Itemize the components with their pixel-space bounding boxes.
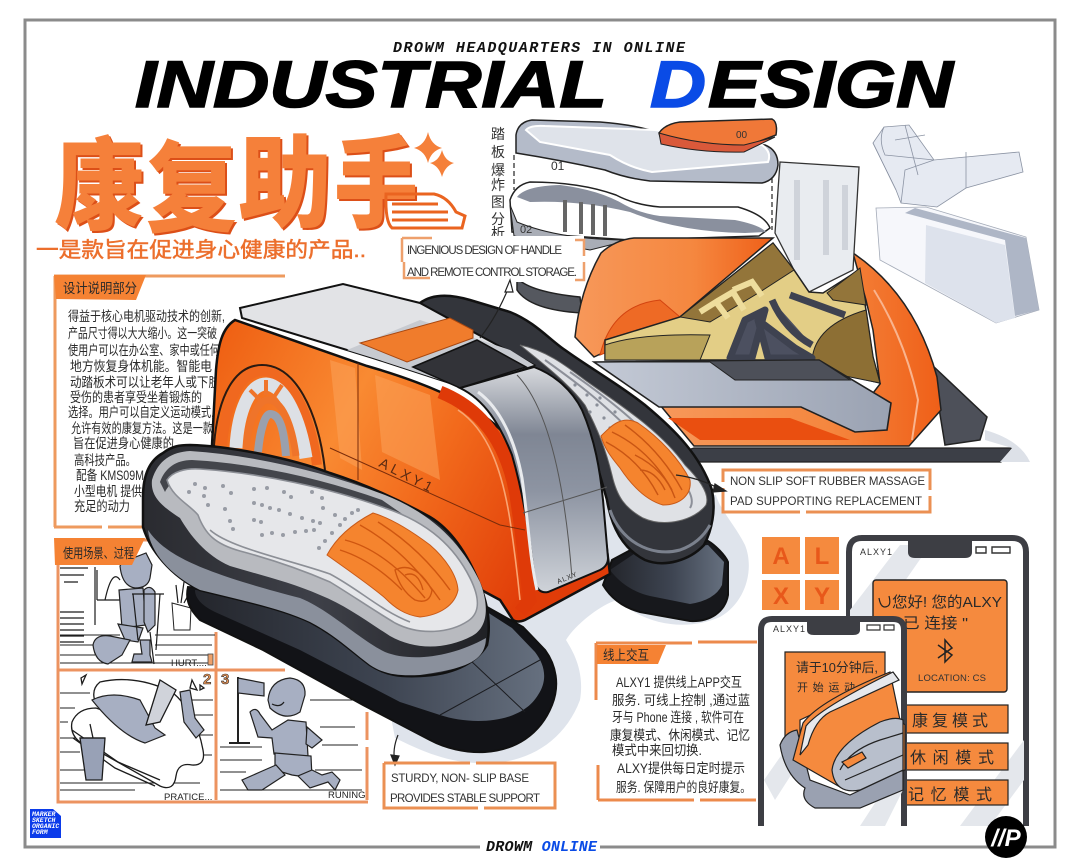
callout: non slip rubber pad bbox=[723, 470, 930, 512]
callout: handle design: AND REMOTE CONTROL STORAGE. bbox=[407, 267, 577, 279]
vertical label bbox=[491, 126, 505, 241]
vertical label: 分 bbox=[491, 211, 505, 227]
online body: 康复模式、休闲模式、记忆 bbox=[610, 727, 750, 743]
grey top cap bbox=[240, 284, 534, 388]
connected text: 已 连接 " bbox=[903, 615, 968, 632]
ALXY letter tiles: L bbox=[815, 543, 829, 570]
description body: 小型电机 提供 bbox=[74, 484, 142, 499]
phone body bbox=[761, 619, 904, 826]
part number 01: 01 bbox=[551, 159, 565, 173]
location text: LOCATION: CS bbox=[918, 673, 986, 684]
vertical label: 炸 bbox=[491, 177, 505, 193]
comic label: hurt: HURT.... bbox=[171, 658, 207, 669]
logo badge: //P bbox=[990, 825, 1022, 852]
description body: 得益于核心电机驱动技术的创新, bbox=[68, 308, 225, 324]
front pedal surface bbox=[167, 469, 477, 631]
description body: 充足的动力 bbox=[74, 499, 130, 514]
chinese title bbox=[54, 103, 418, 253]
online body bbox=[610, 674, 751, 795]
panel: design description bbox=[54, 275, 285, 527]
chinese title: 康 bbox=[54, 105, 144, 250]
rear pedal top surface bbox=[520, 345, 707, 522]
blue corner tag: SKETCH bbox=[32, 817, 56, 824]
rear orange shell bbox=[575, 238, 773, 357]
callout: sturdy base bbox=[384, 763, 555, 808]
description body: 地方恢复身体机能。智能电 bbox=[70, 358, 212, 374]
blue corner tag: MARKER bbox=[31, 811, 56, 818]
callout: handle design: INGENIOUS DESIGN OF HANDLE bbox=[407, 245, 562, 257]
orange outer arc bbox=[660, 253, 941, 446]
rear base bbox=[603, 541, 728, 621]
sock bbox=[775, 162, 859, 292]
online body: 服务. 保障用户的良好康复。 bbox=[616, 779, 751, 795]
rear pedal dots bbox=[573, 383, 617, 430]
chinese title: 复 bbox=[146, 108, 237, 253]
comic number 2: 2 bbox=[203, 671, 211, 688]
main title: INDUSTRIAL bbox=[135, 47, 607, 121]
layer 03 bbox=[517, 278, 582, 313]
online body: ALXY提供每日定时提示 bbox=[617, 761, 745, 776]
reminder text 2: 开始运动 bbox=[797, 680, 855, 694]
blue corner tag: FORM bbox=[32, 829, 49, 836]
blue corner tag: ORGANIC bbox=[32, 823, 59, 830]
callout: handle design bbox=[398, 236, 584, 282]
vertical label: 图 bbox=[491, 194, 505, 210]
sock and shoe assembly bbox=[575, 162, 1030, 462]
handle sketch bbox=[873, 125, 1023, 207]
callout: non slip rubber pad: PAD SUPPORTING REPLACEMENT bbox=[730, 496, 922, 508]
exploded pedal layers bbox=[510, 119, 778, 313]
mini device illustration bbox=[780, 672, 905, 808]
vertical label: 爆 bbox=[491, 162, 505, 178]
vertical label: 踏 bbox=[491, 126, 505, 142]
comic scene 2: using device bbox=[72, 675, 204, 788]
drop shadow under main device bbox=[380, 495, 749, 763]
bluetooth icon bbox=[938, 640, 952, 662]
small phone bbox=[761, 619, 905, 826]
description body: 动踏板术可以让老年人或下肢 bbox=[70, 375, 220, 390]
layer 02 bbox=[510, 182, 770, 240]
main device bbox=[143, 284, 728, 752]
arrow to base bbox=[391, 735, 399, 765]
comic label: runing: RUNING bbox=[328, 790, 365, 801]
mode buttons: 康复模式 bbox=[912, 712, 988, 730]
vertical label: 板 bbox=[491, 144, 505, 160]
metal band bbox=[460, 367, 608, 592]
main title bbox=[135, 47, 955, 121]
notch bbox=[807, 619, 860, 635]
status: ALXY1 bbox=[860, 547, 893, 557]
icon: sparkles bbox=[414, 132, 454, 177]
dashed guides bbox=[514, 145, 772, 230]
shoe bbox=[605, 243, 880, 383]
online body: 牙与 Phone 连接 , 软件可在 bbox=[612, 709, 744, 725]
panel: online interaction bbox=[596, 642, 757, 800]
ALXY letter tiles: Y bbox=[814, 583, 830, 610]
ALXY letter tiles: X bbox=[773, 583, 789, 610]
front base bbox=[187, 587, 556, 752]
description body bbox=[68, 308, 225, 514]
mode buttons: 休闲模式 bbox=[910, 749, 994, 767]
ALXY letter tiles: A bbox=[772, 543, 790, 570]
description body: 配备 KMS09M bbox=[76, 467, 144, 483]
reminder card bbox=[785, 652, 885, 760]
battery bbox=[867, 625, 894, 630]
device logo text: ALXY1 bbox=[377, 454, 438, 496]
panel: usage scenario comic bbox=[54, 538, 368, 803]
usage tag bbox=[54, 538, 145, 565]
description body: 选择。用户可以自定义运动模式, bbox=[68, 404, 214, 420]
front pedal top rim bbox=[152, 451, 486, 646]
online body: 服务. 可线上控制 ,通过蓝 bbox=[612, 693, 750, 708]
small logo text: ALXY bbox=[556, 571, 579, 586]
message card bbox=[873, 580, 1007, 692]
mode buttons: 记忆模式 bbox=[908, 786, 992, 804]
usage tag label: 使用场景、过程 bbox=[63, 545, 134, 561]
online body: ALXY1 提供线上APP交互 bbox=[616, 674, 742, 690]
large phone bbox=[849, 538, 1026, 826]
part number 00: 00 bbox=[736, 130, 748, 141]
block sketch bbox=[876, 207, 1039, 323]
arrow to handle bbox=[480, 280, 513, 338]
front pedal dots bbox=[187, 482, 360, 550]
chinese title: 手 bbox=[334, 103, 418, 248]
vertical label: 析 bbox=[491, 225, 505, 241]
front pedal rim bbox=[143, 445, 489, 676]
arrow to rubber pad bbox=[676, 475, 726, 492]
front orange pad bbox=[327, 513, 458, 617]
orange cap bbox=[659, 119, 776, 147]
comic floor lines bbox=[60, 635, 362, 790]
online tag bbox=[597, 645, 666, 664]
comic label: pratice: PRATICE... bbox=[164, 792, 212, 803]
smiley icon bbox=[879, 596, 890, 607]
description body: 使用户可以在办公室、家中或任何 bbox=[68, 342, 220, 358]
battery bbox=[976, 547, 1010, 553]
grey foot plate bbox=[594, 360, 891, 432]
footer label: DROWM ONLINE bbox=[486, 839, 598, 856]
orange lid bbox=[360, 318, 473, 362]
layer 01 bbox=[516, 120, 778, 183]
orange body bbox=[212, 320, 610, 622]
heading: drowm headquarters: DROWM HEADQUARTERS IN ONLINE bbox=[393, 40, 686, 57]
part number 02: 02 bbox=[520, 224, 532, 236]
comic number 1 bbox=[208, 654, 213, 665]
main title: D bbox=[650, 47, 706, 121]
callout: sturdy base: STURDY, NON- SLIP BASE bbox=[391, 773, 529, 785]
message text: 您好! 您的ALXY bbox=[892, 594, 1002, 611]
main title: ESIGN bbox=[708, 47, 955, 121]
description body: 产品尺寸得以大大缩小。这一突破 bbox=[68, 325, 217, 341]
rear orange pad bbox=[601, 420, 690, 505]
chinese title: 助 bbox=[238, 103, 332, 248]
reminder text: 请于10分钟后, bbox=[796, 660, 878, 675]
dark rear support bbox=[932, 365, 987, 445]
dark handle opening bbox=[413, 340, 526, 388]
subtitle: 一是款旨在促进身心健康的产品.. bbox=[36, 239, 366, 262]
top right form sketch bbox=[873, 125, 1039, 323]
comic number 3: 3 bbox=[221, 671, 229, 688]
rear pedal rim bbox=[420, 296, 714, 563]
description body: 旨在促进身心健康的 bbox=[73, 435, 174, 451]
online tag label: 线上交互 bbox=[603, 647, 649, 663]
description body: 受伤的患者享受坐着锻炼的 bbox=[70, 389, 202, 405]
notch bbox=[908, 538, 972, 558]
comic scene 1: injured person on crutches bbox=[60, 553, 192, 664]
wheel arches bbox=[214, 365, 325, 470]
blue corner tag bbox=[30, 809, 61, 838]
status: ALXY1 bbox=[773, 624, 806, 634]
comic scene 3: runner with flag bbox=[229, 677, 340, 790]
callout: non slip rubber pad: NON SLIP SOFT RUBBER MASSAGE bbox=[730, 476, 925, 488]
online body: 模式中来回切换. bbox=[612, 743, 702, 758]
phone body bbox=[849, 538, 1026, 826]
description tag bbox=[54, 275, 146, 300]
ALXY letter tiles bbox=[762, 537, 839, 610]
logo badge bbox=[985, 816, 1027, 858]
tag label: 设计说明部分 bbox=[63, 281, 137, 296]
description body: 高科技产品。 bbox=[74, 452, 136, 468]
dark bottom bar bbox=[650, 448, 1012, 462]
callout: sturdy base: PROVIDES STABLE SUPPORT bbox=[390, 793, 540, 805]
description body: 允许有效的康复方法。这是一款 bbox=[71, 420, 213, 436]
icon: mini device scribble bbox=[386, 194, 465, 228]
mode buttons bbox=[900, 705, 1008, 805]
